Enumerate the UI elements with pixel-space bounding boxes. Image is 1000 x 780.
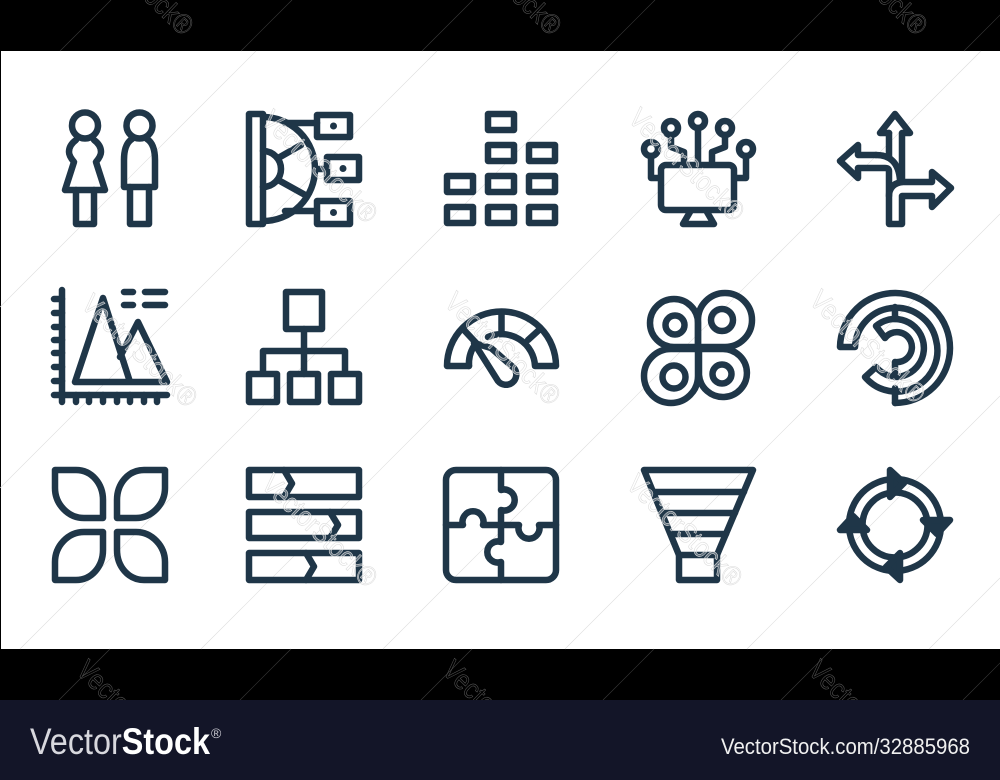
- footer image url: VectorStock.com/32885968: [721, 734, 970, 759]
- watermarks: VectorStock®: [256, 468, 384, 593]
- white icon panel: [1, 51, 1000, 649]
- icon: pie box dots: [330, 122, 346, 216]
- footer logo: VectorStock: [30, 721, 210, 762]
- registered mark: ®: [211, 725, 222, 741]
- icon: sales funnel: [644, 470, 753, 580]
- watermarks: VectorStock®: [256, 104, 384, 229]
- icon: four leaves: [55, 470, 165, 580]
- icon: jigsaw puzzle: [446, 470, 556, 580]
- icon: monitor with circuit nodes: [644, 114, 753, 224]
- watermarks: VectorStock®: [804, 284, 932, 409]
- icon: three way arrows: [840, 114, 951, 224]
- watermarks: VectorStock®: [623, 102, 751, 227]
- footer bar: [0, 700, 1000, 780]
- watermarks: VectorStock®: [439, 286, 567, 411]
- icon: concentric radial chart: [840, 293, 950, 403]
- icon: four circle petals: [644, 293, 752, 403]
- watermarks: VectorStock®: [76, 288, 204, 413]
- icon: half pie with boxes: [249, 114, 359, 224]
- icon: mountain area chart: [54, 290, 167, 402]
- watermarks: VectorStock®: [621, 468, 749, 593]
- icon: bar grid: [447, 114, 555, 223]
- icon: gauge: [447, 312, 556, 385]
- icon: hierarchy chart: [249, 292, 359, 402]
- icon: horizontal progress bars: [249, 470, 359, 580]
- icon: circular arrows: [840, 470, 950, 580]
- icon: woman and man: [65, 112, 155, 224]
